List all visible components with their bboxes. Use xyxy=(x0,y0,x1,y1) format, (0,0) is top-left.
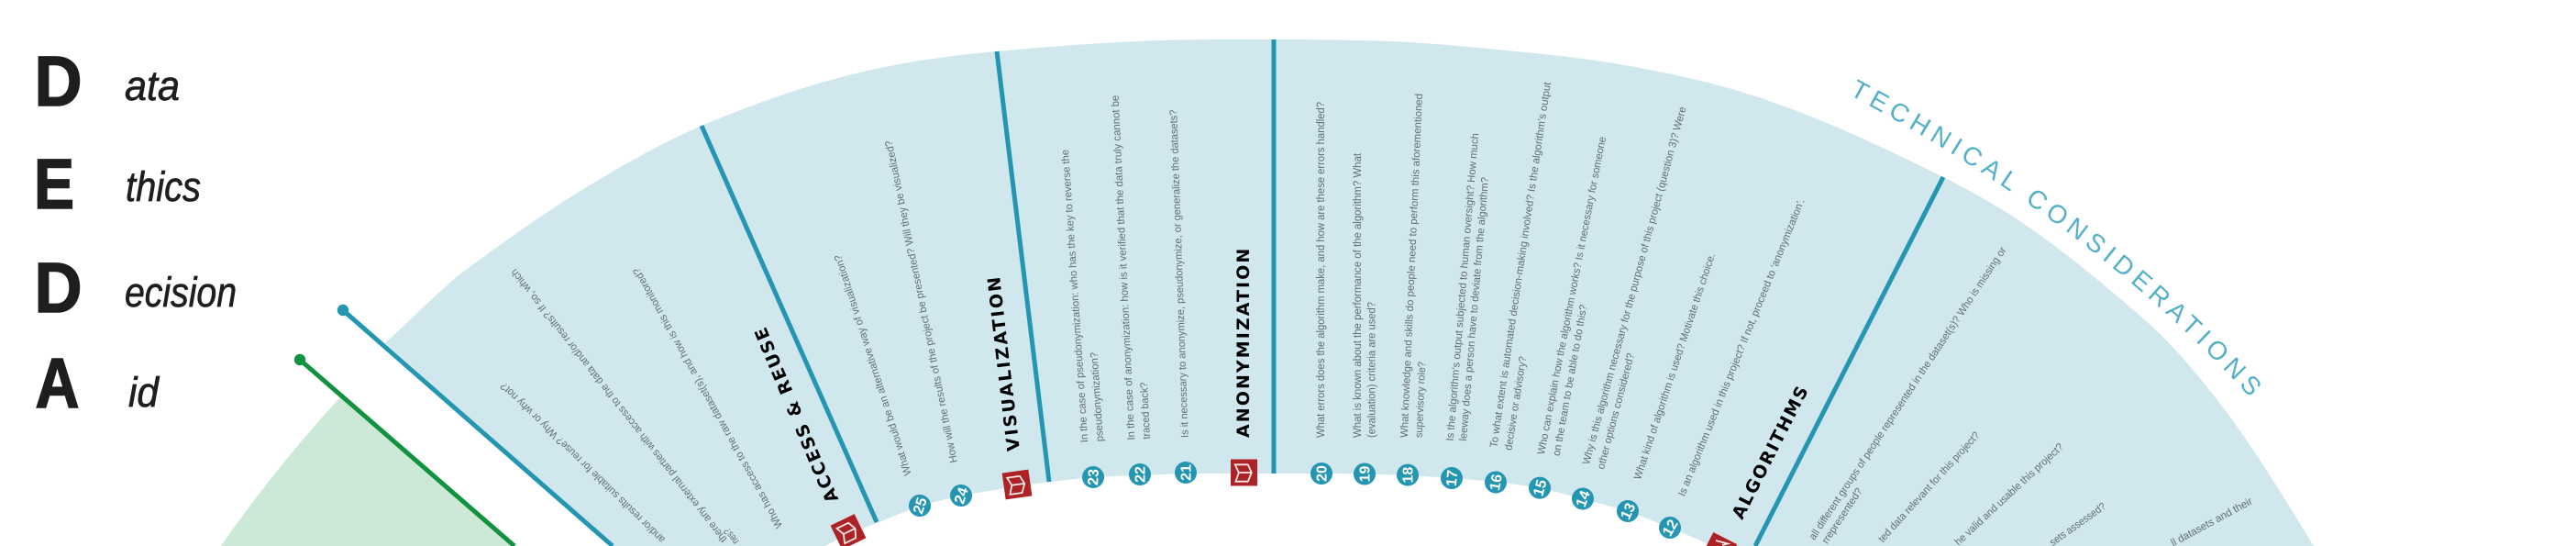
section: algorithms xyxy=(1310,81,1813,546)
panel: green segment xyxy=(221,397,514,546)
question 22: traced back? xyxy=(1139,382,1153,440)
question: representation: all different groups of people represented in the dataset(s)? Who is missing or xyxy=(1808,245,2009,542)
question 13: What kind of algorithm is used? Motivate this choice. xyxy=(1632,252,1718,481)
question 23: pseudonymization? xyxy=(1089,351,1106,442)
question 15: on the team to be able to do this? xyxy=(1552,304,1590,457)
number 20 xyxy=(1310,462,1332,485)
number 21 xyxy=(1175,462,1197,484)
questions: access and reuse: Who has access to the raw dataset(s), and how is this monitored? xyxy=(632,266,785,529)
question 15: Who can explain how the algorithm works? Is it necessary for someone xyxy=(1536,136,1609,455)
question 19 xyxy=(1353,152,1378,438)
number 18: 18 xyxy=(1401,467,1416,483)
number 23: 23 xyxy=(1086,469,1102,485)
divider: blue band left edge with dot xyxy=(337,305,613,546)
title: DEDA acronym xyxy=(34,42,237,423)
question 22 xyxy=(1111,95,1153,440)
heading: anonymization: ANONYMIZATION xyxy=(1233,249,1254,438)
number 24 xyxy=(947,482,975,509)
title: DEDA acronym: D xyxy=(35,42,83,121)
question 23: In the case of pseudonymization: who has the key to reverse the xyxy=(1060,150,1090,443)
divider: algorithms and data xyxy=(1755,177,1943,546)
title: DEDA acronym: ecision xyxy=(125,269,237,316)
icon: book algorithms xyxy=(1707,532,1737,546)
number 25 xyxy=(906,492,934,519)
question 22: In the case of anonymization: how is it verified that the data truly cannot be xyxy=(1111,95,1137,440)
question 18: What knowledge and skills do people need to perform this aforementioned xyxy=(1399,94,1425,438)
questions: access and reuse: nes? xyxy=(722,526,742,546)
panel: technical considerations band xyxy=(385,39,2314,546)
number 19 xyxy=(1354,462,1376,485)
number 17 xyxy=(1440,466,1464,490)
question: relevance: ted data relevant for this project? xyxy=(1876,430,1983,545)
question 14: Why is this algorithm necessary for the purpose of this project (question 3)? Were xyxy=(1581,106,1689,466)
number 22: 22 xyxy=(1133,466,1148,483)
question 19: What is known about the performance of the algorithm? What xyxy=(1353,152,1364,438)
divider: anonymization and algorithms xyxy=(1271,39,1277,474)
title: DEDA acronym: A xyxy=(35,344,79,423)
question 19: (evaluation) criteria are used? xyxy=(1367,302,1378,438)
divider: green segment edge with dot xyxy=(294,354,514,546)
title: DEDA acronym: thics xyxy=(126,163,201,210)
question 14: other options considered? xyxy=(1596,352,1637,471)
number 23 xyxy=(1082,466,1104,488)
section: data questions xyxy=(1808,245,2255,546)
number 25: 25 xyxy=(911,496,931,516)
number 15: 15 xyxy=(1531,478,1551,498)
heading: visualization: VISUALIZATION xyxy=(984,276,1024,452)
question 25: What would be an alternative way of visualization? xyxy=(833,253,914,477)
number 12 xyxy=(1655,513,1685,542)
section: anonymization xyxy=(1060,95,1257,488)
question 17: Is the algorithm’s output subjected to human oversight? How much xyxy=(1445,133,1481,441)
question: validity: he valid and usable this project? xyxy=(1953,441,2066,546)
question 20: What errors does the algorithm make, and how are these errors handled? xyxy=(1316,102,1327,438)
number 16: 16 xyxy=(1487,473,1506,492)
question 12: Is an algorithm used in this project? If not, proceed to ‘anonymization’. xyxy=(1676,197,1808,498)
questions: access and reuse: and/or results suitable for reuse? Why or why not? xyxy=(499,380,668,545)
section: access and reuse xyxy=(499,266,866,546)
heading: technical considerations: TECHNICAL CONSIDERATIONS xyxy=(1854,79,2261,395)
number 19: 19 xyxy=(1357,466,1374,482)
question 17: leeway does a person have to deviate from the algorithm? xyxy=(1458,177,1491,441)
title: DEDA acronym: E xyxy=(34,145,74,224)
question 24: How will the results of the project be presented? Will they be visualized? xyxy=(884,139,960,463)
icon: book access and reuse xyxy=(831,514,866,546)
title: DEDA acronym: D xyxy=(35,249,83,328)
number 18 xyxy=(1397,464,1419,486)
number 15 xyxy=(1526,474,1553,501)
question 21: Is it necessary to anonymize, pseudonymize, or generalize the datasets? xyxy=(1168,109,1191,438)
question 23 xyxy=(1060,150,1106,443)
number 24: 24 xyxy=(952,485,972,506)
title: DEDA acronym: id xyxy=(128,369,160,416)
question 16: decisive or advisory? xyxy=(1503,356,1529,451)
number 16 xyxy=(1483,470,1509,495)
number 12: 12 xyxy=(1660,517,1682,539)
number 21: 21 xyxy=(1179,464,1194,481)
heading: algorithms: ALGORITHMS xyxy=(1729,383,1813,522)
number 14: 14 xyxy=(1574,488,1594,509)
number 22 xyxy=(1129,463,1151,485)
number 13: 13 xyxy=(1618,501,1639,522)
heading: access and reuse: ACCESS & REUSE xyxy=(751,324,843,506)
number 20: 20 xyxy=(1315,465,1330,482)
title: DEDA acronym: ata xyxy=(125,62,180,109)
divider: access and visualization xyxy=(702,126,877,522)
question 16: To what extent is automated decision-making involved? Is the algorithm’s output xyxy=(1488,81,1553,449)
number 14 xyxy=(1569,485,1597,513)
question 18: supervisory role? xyxy=(1414,362,1428,438)
divider: visualization and anonymization xyxy=(997,51,1049,482)
number 17: 17 xyxy=(1444,469,1461,487)
number 13 xyxy=(1613,496,1642,526)
question: representation: rrepresented? xyxy=(1820,486,1865,546)
questions: access and reuse: there any external parties with access to the data and/or results? If so, which xyxy=(509,266,730,544)
icon: book anonymization xyxy=(1231,459,1257,486)
section: visualization xyxy=(833,139,1032,519)
icon: book visualization xyxy=(1002,470,1032,499)
